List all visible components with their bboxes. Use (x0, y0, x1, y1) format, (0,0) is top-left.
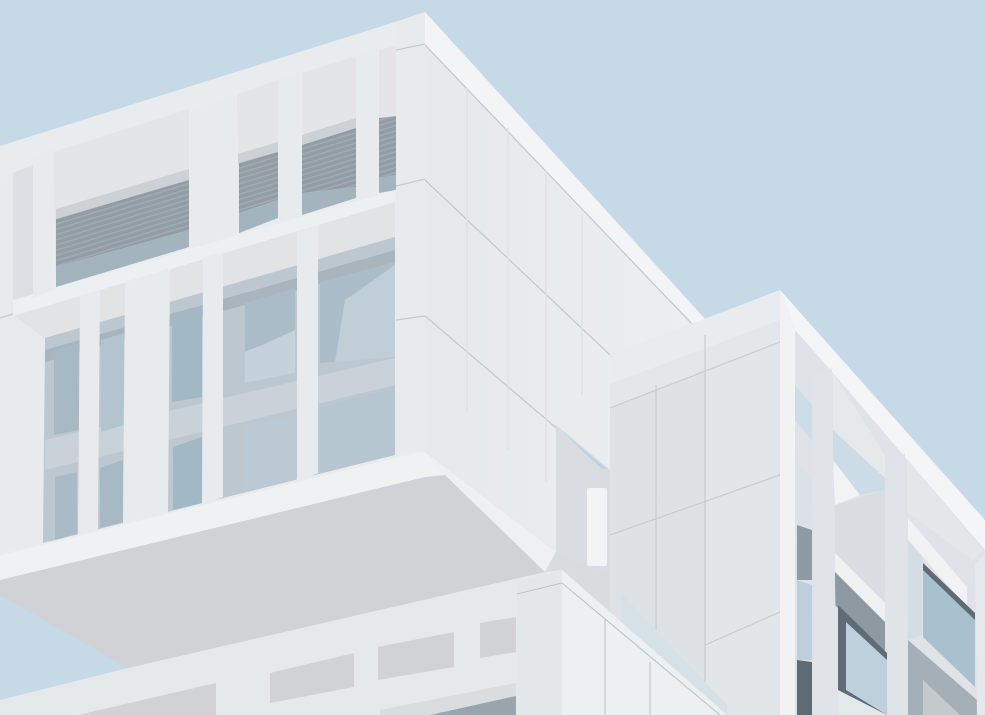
ceiling and window wall of middle floors (13, 202, 395, 543)
top floor recesses (13, 46, 396, 300)
slab side (425, 452, 556, 572)
sky through upper terrace (833, 430, 885, 495)
bracket plate (556, 425, 607, 575)
right block: front wall (610, 290, 798, 715)
fins (812, 368, 837, 715)
corner column (517, 570, 727, 715)
vertical fins (0, 12, 425, 553)
glass parapet (835, 490, 885, 603)
lower block (0, 570, 727, 715)
floor band (13, 190, 395, 316)
far bay (907, 460, 983, 560)
slab underside (0, 475, 545, 668)
slab front band (0, 452, 445, 580)
upper block: left facade (0, 12, 425, 555)
glass at base (380, 683, 516, 715)
left bay (795, 385, 812, 440)
recesses (78, 683, 216, 715)
cantilever slab (0, 452, 556, 668)
light fixture (587, 488, 607, 566)
upper block: right side wall (425, 12, 706, 620)
right block: side frame and windows (780, 290, 985, 715)
top rim (780, 290, 985, 550)
junction filler behind bracket (545, 468, 610, 620)
